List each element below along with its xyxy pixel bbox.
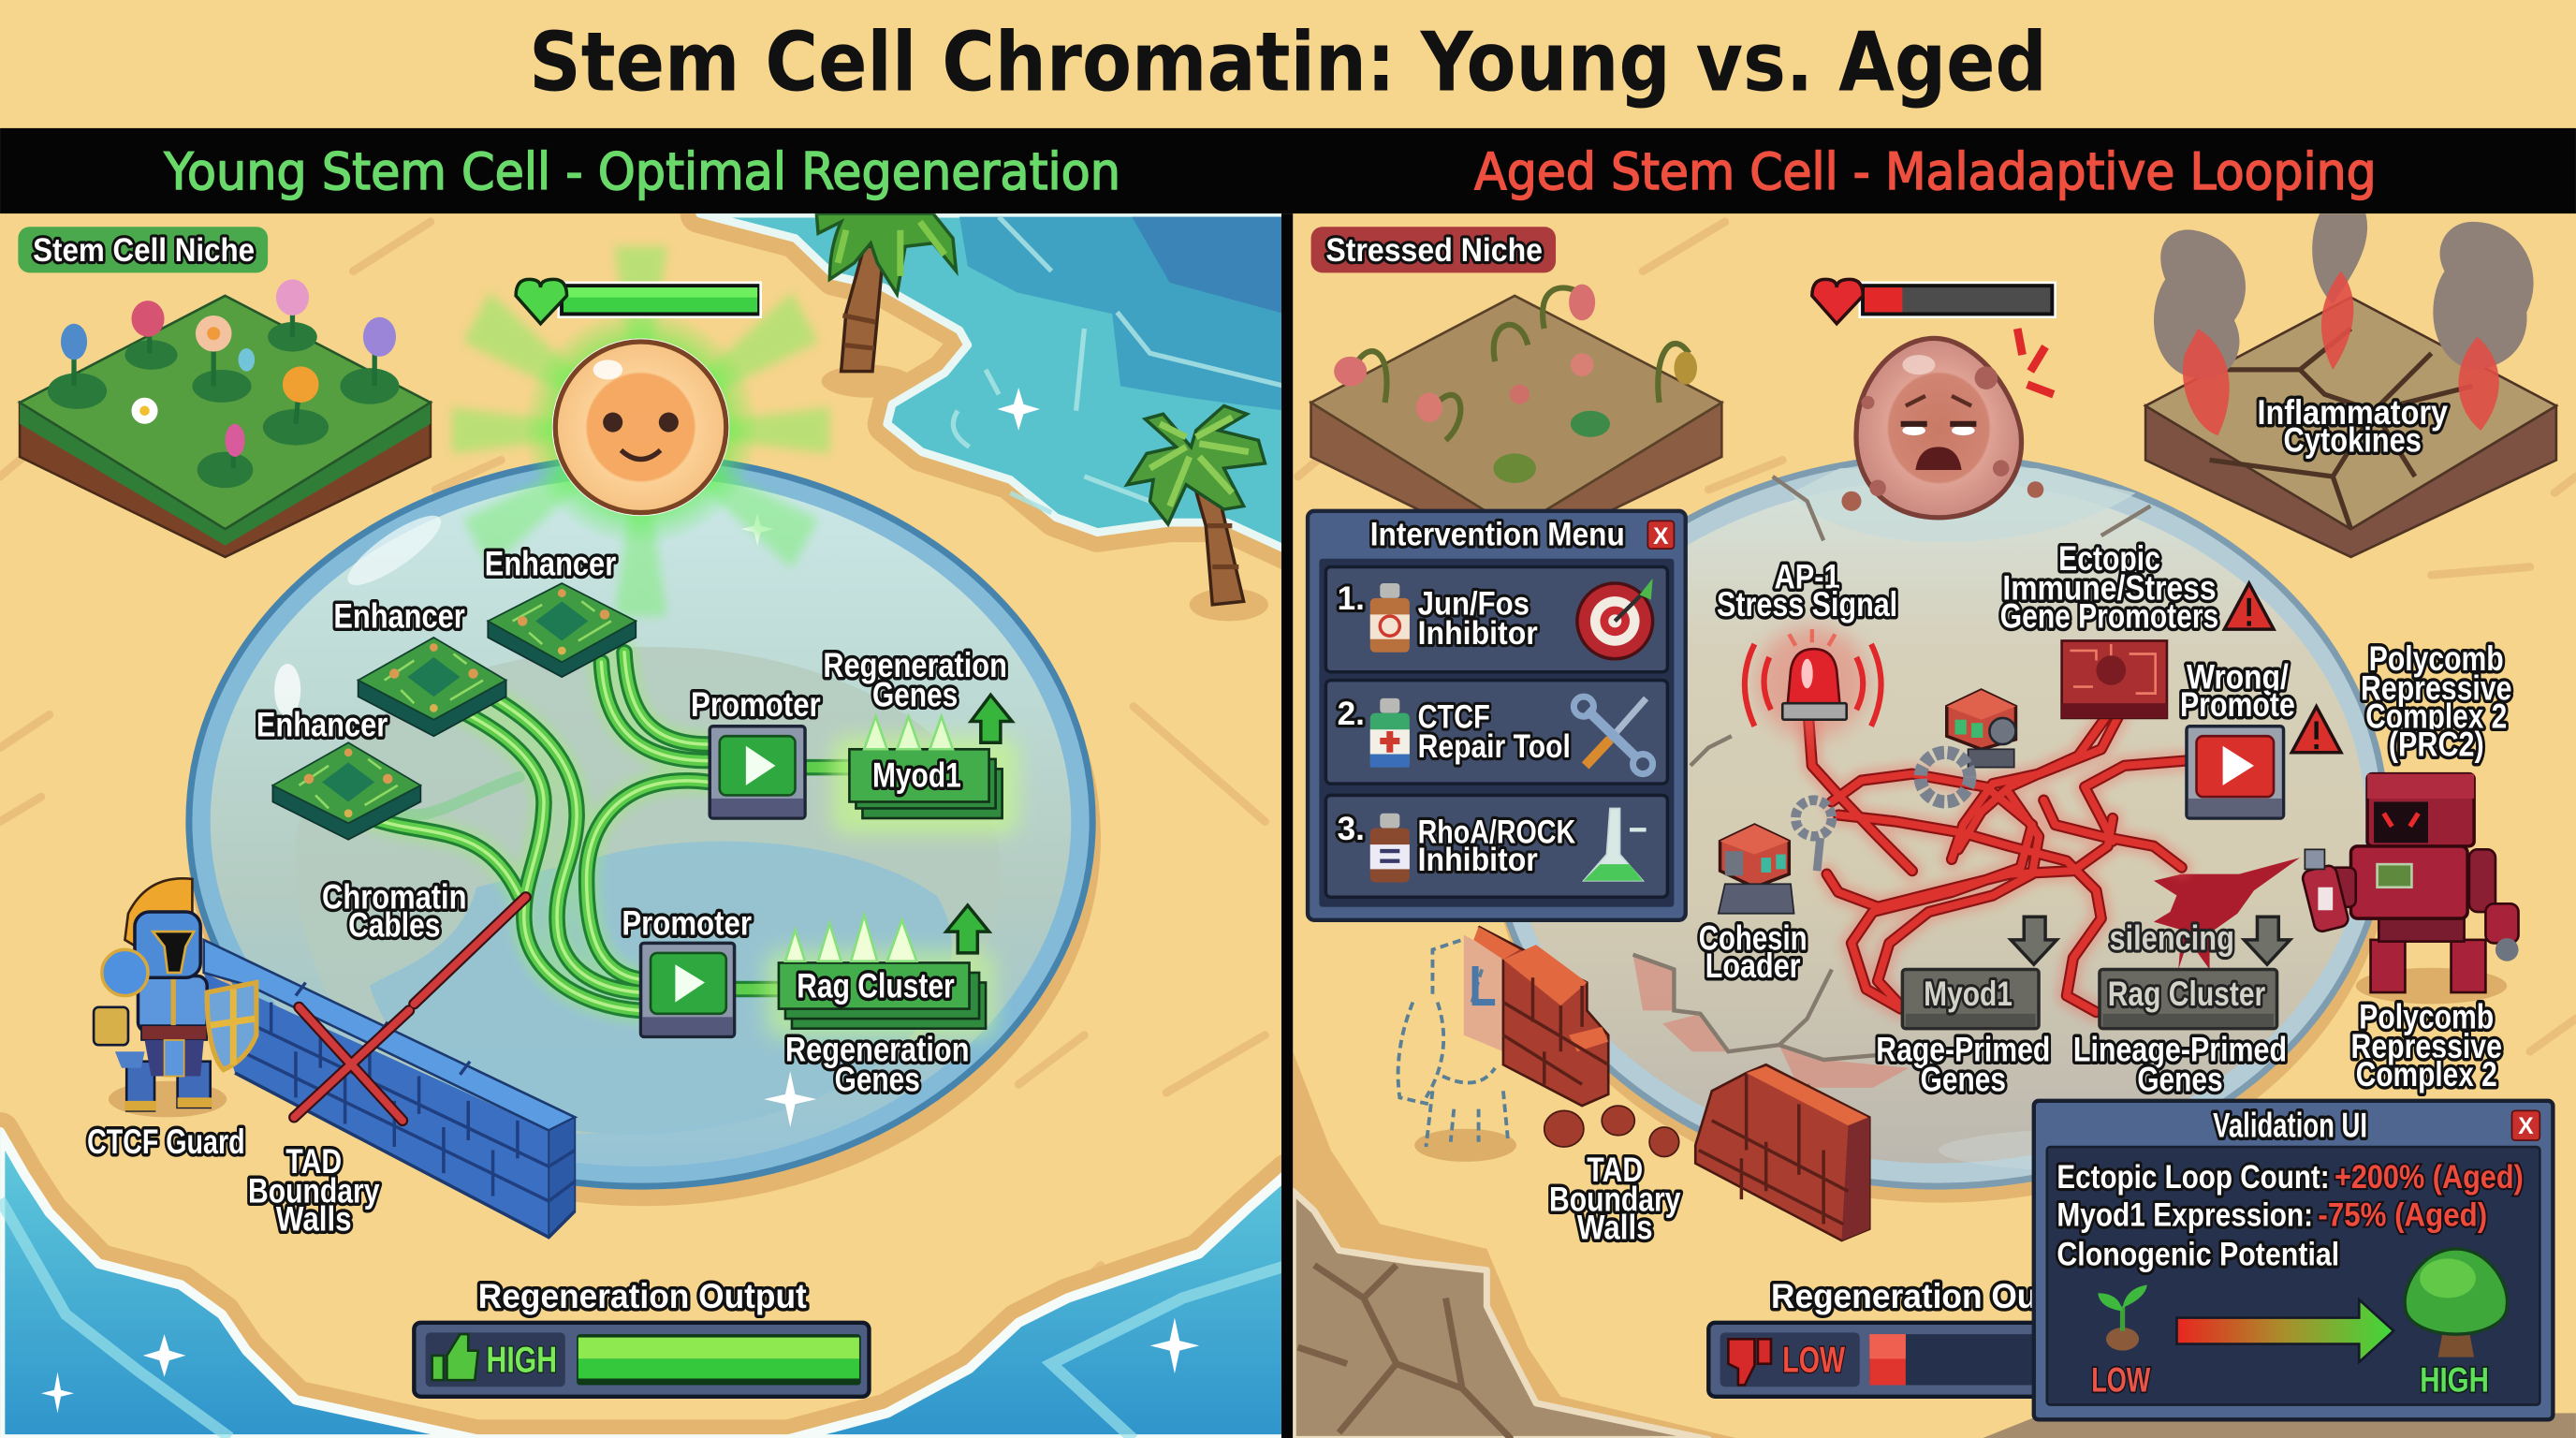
- menu title: Intervention Menu: [1370, 517, 1625, 553]
- label: wrong promoter: Promote: [2180, 685, 2295, 724]
- enhancer circuit boards: [272, 583, 636, 840]
- gene card: Myod1: [831, 736, 1018, 835]
- menu item 3: [1325, 795, 1667, 897]
- label: AP-1 stress signal: [1717, 557, 1897, 624]
- heading: aged: Aged Stem Cell - Maladaptive Looping: [1474, 142, 2377, 201]
- menu item 2: CTCF: [1418, 698, 1490, 735]
- promoter button: red: [2187, 726, 2284, 818]
- broken wall: left: [1473, 927, 1608, 1106]
- activity spikes: Rag Cluster: [785, 916, 916, 961]
- label: silencing: silencing: [2110, 918, 2234, 957]
- flowers: [48, 279, 400, 488]
- label: regeneration genes bottom: Genes: [835, 1060, 920, 1098]
- labels: enhancers: [256, 544, 616, 743]
- sad aged cell: [1841, 329, 2054, 518]
- CTCF guard knight: [94, 878, 256, 1117]
- label: ectopic gene promoters: [2000, 539, 2218, 635]
- chromatin cables: green: [372, 653, 849, 1010]
- close button: X: [2518, 1114, 2534, 1139]
- happy cell: [552, 339, 729, 516]
- metric: Myod1 expression: -75% (Aged): [2318, 1196, 2487, 1233]
- meter: regeneration high: [414, 1323, 869, 1397]
- icon: tree: [2405, 1249, 2508, 1357]
- label: inflammatory cytokines: Inflammatory: [2257, 393, 2448, 432]
- arrow: up Rag Cluster: [946, 905, 989, 953]
- label: PRC2: Repressive: [2361, 669, 2511, 708]
- nucleus bubble: young: [187, 457, 1101, 1206]
- label: polycomb repressive complex: Complex 2: [2356, 1055, 2497, 1093]
- icon: flask: [1584, 808, 1647, 881]
- label: TAD boundary walls aged: Walls: [1577, 1208, 1653, 1246]
- label: lineage-primed genes: Genes: [2137, 1060, 2223, 1098]
- label: regeneration genes top: Regeneration: [823, 646, 1007, 684]
- gray arrow: Rag Cluster down: [2244, 917, 2291, 964]
- label: lineage-primed genes: Lineage-Primed: [2073, 1031, 2287, 1069]
- arrow: up Myod1: [971, 695, 1012, 742]
- gene card: Rag Cluster silenced: Rag Cluster: [2108, 975, 2265, 1013]
- label: cohesin loader: [1699, 918, 1808, 985]
- label: PRC2: [2361, 639, 2511, 763]
- gene card: Rag Cluster: Rag Cluster: [797, 966, 955, 1005]
- menu item 3: Inhibitor: [1418, 842, 1538, 878]
- menu item 3: 3.: [1338, 811, 1365, 847]
- metric: Myod1 expression: Myod1 Expression:: [2056, 1196, 2313, 1233]
- metric: ectopic loop count: +200% (Aged): [2334, 1159, 2524, 1196]
- label: PRC2: Polycomb: [2369, 639, 2504, 678]
- ectopic promoter chip: [2062, 640, 2167, 718]
- promoter button: bottom: [641, 943, 735, 1036]
- ocean: bottom: [0, 1132, 1288, 1438]
- close button: X: [1653, 524, 1669, 550]
- icon: sprout: [2098, 1284, 2147, 1351]
- label: ectopic gene promoters: Ectopic: [2058, 539, 2160, 578]
- label: rage-primed genes: Genes: [1921, 1060, 2006, 1098]
- icon: bottle: [1370, 698, 1410, 768]
- rubble: [1544, 1106, 1679, 1157]
- AP-1 siren: [1745, 626, 1881, 738]
- enhancer board 1: [488, 583, 636, 677]
- metric: ectopic loop count: [2056, 1159, 2524, 1196]
- label: regeneration output aged: Regeneration Output: [1771, 1277, 2100, 1315]
- menu item 2: Repair Tool: [1418, 728, 1571, 765]
- heading: young: Young Stem Cell - Optimal Regeneration: [164, 142, 1120, 201]
- icon: bottle: [1370, 814, 1410, 882]
- label: cohesin loader: Loader: [1705, 946, 1801, 985]
- menu item 3: RhoA/ROCK: [1418, 814, 1576, 850]
- warning icon: promoter: [2291, 707, 2341, 753]
- metric: Myod1 expression: [2056, 1196, 2487, 1233]
- panel: validation UI: [2034, 1101, 2553, 1419]
- thumbs up icon: [432, 1334, 478, 1380]
- label: promoter top: Promoter: [691, 685, 821, 724]
- title: Stem Cell Chromatin: Young vs. Aged: [529, 15, 2047, 110]
- label: TAD boundary walls aged: TAD: [1587, 1151, 1643, 1189]
- arrow: low to high: [2176, 1299, 2393, 1362]
- thumbs down icon: [1728, 1339, 1771, 1385]
- meter: regeneration high: HIGH: [487, 1340, 557, 1380]
- smoke plumes: [2154, 213, 2534, 435]
- label: CTCF guard: CTCF Guard: [87, 1123, 245, 1161]
- label: AP-1 stress signal: Stress Signal: [1717, 585, 1897, 624]
- icon: crossed tools: [1573, 697, 1653, 774]
- cohesin robot: lower: [1719, 800, 1832, 914]
- health bar: aged: [1812, 279, 2056, 324]
- gene card: Rag Cluster: [766, 949, 996, 1038]
- wilted plants: [1355, 287, 1689, 440]
- label: TAD boundary walls aged: Boundary: [1549, 1180, 1681, 1218]
- activity spikes: Myod1: [864, 716, 953, 749]
- icon: bottle: [1370, 583, 1410, 653]
- label: AP-1 stress signal: AP-1: [1774, 557, 1840, 595]
- spray can: [2301, 849, 2349, 933]
- metric: clonogenic potential: Clonogenic Potential: [2056, 1236, 2339, 1272]
- label chip: stem cell niche: Stem Cell Niche: [33, 232, 255, 269]
- label: rage-primed genes: [1876, 1031, 2050, 1098]
- label: cohesin loader: Cohesin: [1699, 918, 1808, 957]
- label: lineage-primed genes: [2073, 1031, 2287, 1098]
- label: polycomb repressive complex: Repressive: [2351, 1027, 2502, 1065]
- label: inflammatory cytokines: [2257, 393, 2448, 460]
- panel: aged stem cell: [1293, 213, 2576, 1438]
- niche: withered platform: [1311, 285, 1721, 557]
- label: rage-primed genes: Rage-Primed: [1876, 1031, 2050, 1069]
- label: regeneration output: Regeneration Output: [478, 1277, 807, 1315]
- menu item 2: [1325, 681, 1667, 784]
- meter: regeneration low: LOW: [1782, 1340, 1845, 1380]
- label: promoter bottom: Promoter: [622, 904, 752, 943]
- niche: flower garden platform: [20, 279, 431, 557]
- label: TAD boundary walls aged: [1549, 1151, 1681, 1246]
- red X: broken boundary: [294, 897, 526, 1121]
- cracked shore: bottom: [1293, 1051, 2576, 1438]
- label: chromatin cables: [322, 878, 466, 944]
- promoter button: top: [710, 726, 805, 818]
- close button: [1647, 521, 1674, 550]
- meter: regeneration low: [1708, 1323, 2163, 1397]
- label: chromatin cables: Chromatin: [322, 878, 466, 917]
- label: polycomb repressive complex: Polycomb: [2359, 998, 2494, 1036]
- ghost CTCF guard: [1398, 935, 1516, 1162]
- polycomb robot: [2301, 774, 2519, 1004]
- label: regeneration genes top: Genes: [872, 676, 958, 714]
- labels: enhancers: Enhancer: [333, 596, 465, 635]
- label: polycomb repressive complex: [2351, 998, 2502, 1093]
- label: regeneration genes top: [823, 646, 1007, 714]
- palm tree: right: [1127, 405, 1268, 621]
- broken wall: right: [1695, 1064, 1869, 1240]
- label: wrong promoter: [2180, 657, 2295, 724]
- gray arrow: Myod1 down: [2011, 917, 2056, 964]
- label: chromatin cables: Cables: [348, 905, 440, 944]
- labels: enhancers: Enhancer: [256, 705, 388, 743]
- sparkle: [764, 1071, 816, 1127]
- labels: enhancers: Enhancer: [485, 544, 616, 582]
- label: regeneration genes bottom: Regeneration: [785, 1031, 970, 1069]
- gene card: Myod1 silenced: [1902, 969, 2039, 1029]
- icon: target: [1577, 579, 1653, 659]
- menu item 1: 1.: [1338, 580, 1365, 617]
- tangled chromatin cables: red: [1808, 714, 2185, 1012]
- cohesin robot: upper: [1921, 690, 2015, 801]
- header bar: [0, 128, 2576, 213]
- label: wrong promoter: Wrong/: [2187, 657, 2289, 696]
- red splatter: silencing: [2154, 858, 2300, 969]
- ocean: top right: [700, 213, 1288, 550]
- menu item 1: [1325, 566, 1667, 672]
- label: regeneration genes bottom: [785, 1031, 970, 1098]
- menu item 1: Jun/Fos: [1418, 585, 1530, 622]
- validation title: Validation UI: [2213, 1106, 2367, 1144]
- health bar: young: [516, 279, 761, 324]
- cracked platform: inflammatory cytokines: [2145, 298, 2556, 557]
- label: low: LOW: [2091, 1361, 2151, 1400]
- metric: ectopic loop count: Ectopic Loop Count:: [2056, 1159, 2330, 1196]
- panel: intervention menu: [1308, 511, 1686, 920]
- label: TAD boundary walls: TAD: [285, 1142, 342, 1181]
- menu item 2: 2.: [1338, 696, 1365, 732]
- label: PRC2: (PRC2): [2389, 725, 2484, 763]
- menu item 1: Inhibitor: [1418, 615, 1538, 652]
- enhancer board 2: [359, 638, 506, 736]
- enhancer board 3: [272, 742, 420, 840]
- label: ectopic gene promoters: Immune/Stress: [2002, 569, 2217, 608]
- gene card: Myod1 silenced: Myod1: [1924, 975, 2012, 1013]
- gene card: Rag Cluster silenced: [2100, 969, 2277, 1029]
- panel: young stem cell: [0, 213, 1288, 1438]
- nucleus bubble: aged: [1492, 457, 2392, 1203]
- label: TAD boundary walls: Walls: [276, 1200, 352, 1239]
- label: TAD boundary walls: Boundary: [248, 1172, 380, 1211]
- center divider: [1281, 213, 1293, 1438]
- label: high: HIGH: [2420, 1361, 2489, 1400]
- green glow and stem cell: [452, 246, 829, 616]
- palm tree: top: [816, 213, 956, 398]
- warning icon: ectopic: [2224, 583, 2274, 629]
- label chip: stressed niche: Stressed Niche: [1325, 232, 1543, 269]
- label: ectopic gene promoters: Gene Promoters: [2000, 596, 2218, 635]
- close button: [2511, 1110, 2539, 1140]
- TAD boundary wall: blue: [204, 940, 575, 1238]
- label: PRC2: Complex 2: [2365, 697, 2507, 735]
- label: inflammatory cytokines: Cytokines: [2284, 421, 2422, 460]
- label: TAD boundary walls: [248, 1142, 380, 1239]
- gene card: Myod1: Myod1: [872, 756, 961, 795]
